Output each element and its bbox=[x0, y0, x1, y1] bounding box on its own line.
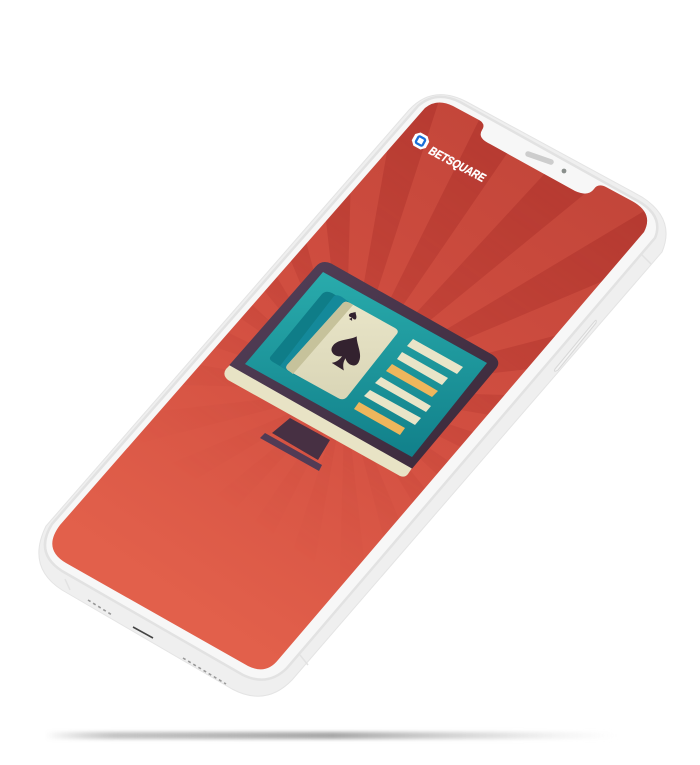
monitor stand base bbox=[260, 433, 322, 471]
small spade bbox=[347, 310, 359, 322]
phone bbox=[38, 94, 666, 697]
phone body bbox=[39, 95, 666, 696]
bottom speaker and port bbox=[88, 600, 226, 684]
earpiece bbox=[528, 154, 551, 162]
monitor stand bbox=[272, 418, 330, 460]
lightning port bbox=[133, 627, 153, 638]
logo icon bbox=[410, 131, 431, 151]
card side band bbox=[286, 302, 353, 374]
list bars bbox=[354, 339, 463, 435]
logo wordmark: BETSQUARE bbox=[426, 144, 489, 184]
monitor frame bbox=[230, 263, 498, 468]
playing card bbox=[286, 302, 398, 399]
sunburst rays bbox=[250, 102, 648, 446]
wallpaper bbox=[52, 102, 648, 670]
ground shadow bbox=[45, 732, 620, 739]
back card dark bbox=[270, 292, 360, 378]
large spade bbox=[325, 328, 370, 375]
back card mid bbox=[280, 295, 360, 378]
monitor display bbox=[245, 272, 487, 457]
front camera bbox=[562, 169, 566, 173]
phone bezel bbox=[45, 97, 657, 680]
side button bbox=[554, 320, 596, 371]
screen bbox=[52, 102, 648, 670]
card face bbox=[286, 302, 398, 399]
logo bbox=[410, 131, 489, 184]
monitor chin bbox=[224, 365, 412, 477]
monitor illustration bbox=[224, 263, 498, 477]
antenna bands bbox=[65, 254, 651, 665]
